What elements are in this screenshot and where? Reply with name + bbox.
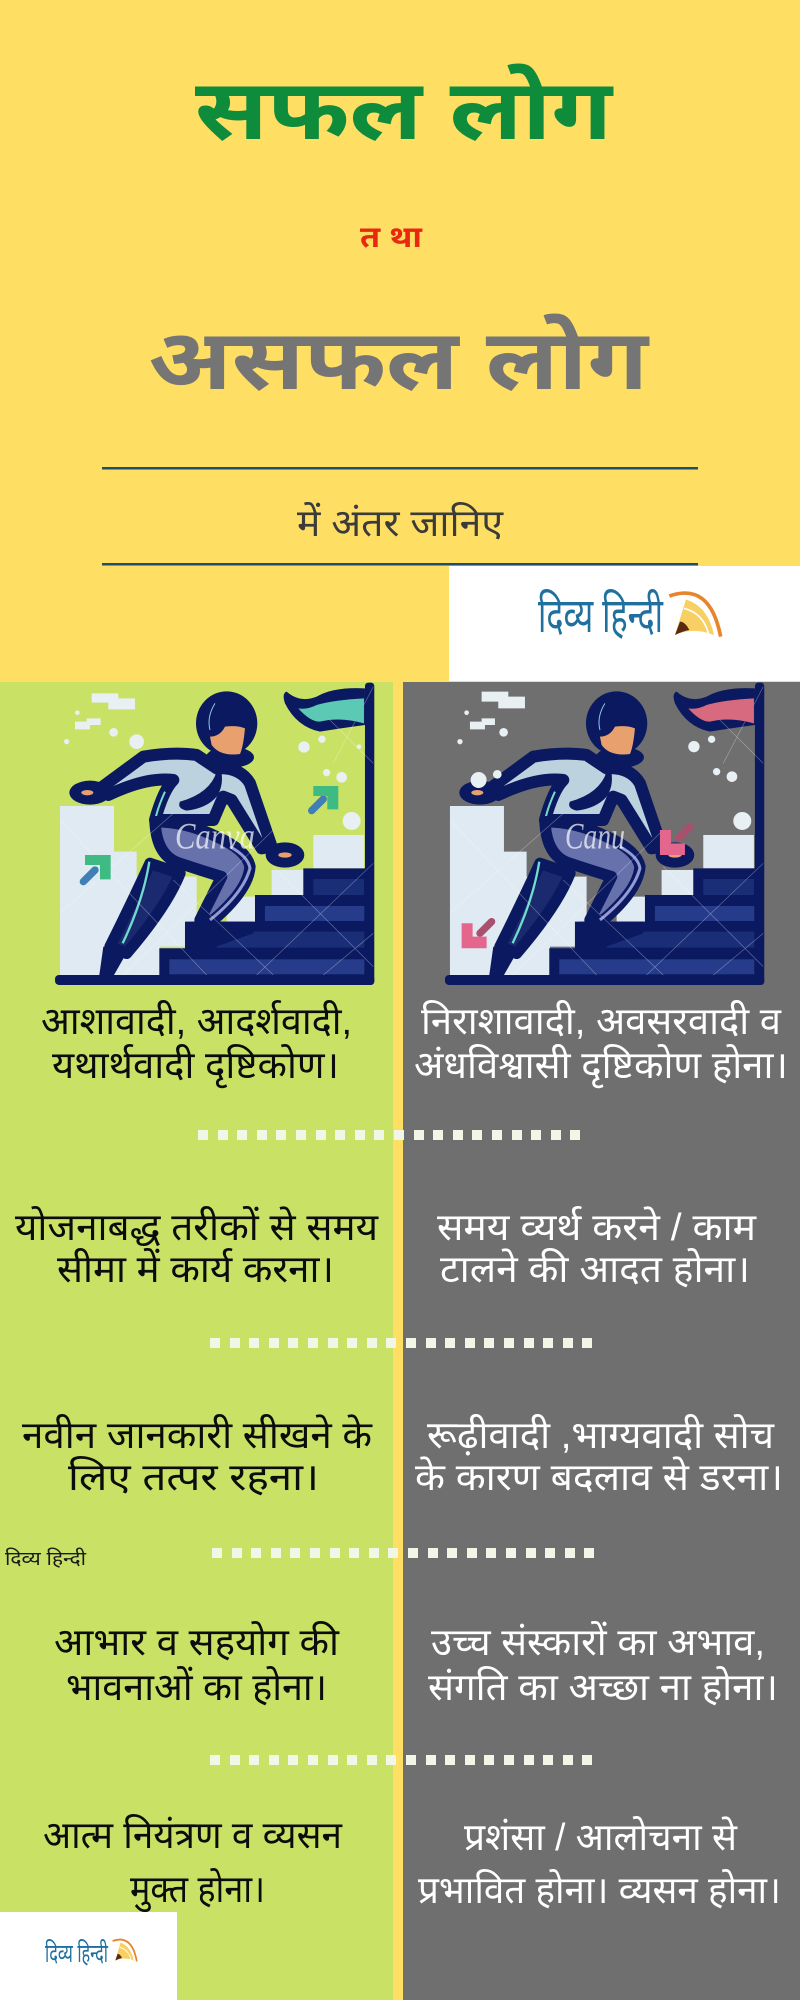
logo card: top right	[449, 566, 800, 681]
text: row 1 left: आशावादी, आदर्शवादी,	[41, 999, 352, 1043]
logo card: bottom left	[0, 1912, 177, 2000]
illustration: person climbing stairs upward	[55, 683, 374, 985]
text: row 5 right: प्रभावित होना। व्यसन होना।	[418, 1868, 781, 1912]
icon: up arrows	[83, 786, 338, 882]
text: row 2 right: समय व्यर्थ करने / काम	[437, 1205, 757, 1249]
title: unsuccessful people: असफल लोग	[148, 313, 651, 407]
text: row 3 left: लिए तत्पर रहना।	[68, 1455, 319, 1499]
text: row 1 left: यथार्थवादी दृष्टिकोण।	[52, 1043, 339, 1089]
watermark text: दिव्य हिन्दी	[5, 1548, 87, 1570]
flag: pink	[688, 698, 754, 723]
panel: successful people column	[0, 682, 393, 2000]
text: row 2 left: योजनाबद्ध तरीकों से समय	[15, 1205, 379, 1249]
watermark: Canva: Canva	[175, 815, 255, 856]
icon: down arrows	[462, 827, 690, 948]
text: row 4 right	[428, 1620, 778, 1709]
divider: row 3	[212, 1548, 594, 1558]
text: row 5 left: मुक्त होना।	[130, 1867, 265, 1912]
text: row 2 left	[15, 1205, 379, 1291]
text: row 1 right: निराशावादी, अवसरवादी व	[421, 999, 782, 1043]
divider: row 4	[210, 1755, 592, 1765]
text: row 2 right: टालने की आदत होना।	[440, 1247, 750, 1291]
text: row 3 right: रूढ़ीवादी ,भाग्यवादी सोच	[427, 1413, 775, 1457]
logo card: top right: दिव्य हिन्दी	[538, 589, 664, 643]
text: row 4 right: उच्च संस्कारों का अभाव,	[431, 1620, 765, 1664]
text: row 5 right: प्रशंसा / आलोचना से	[464, 1815, 738, 1859]
divider: row 2	[210, 1338, 592, 1348]
text: row 5 left	[43, 1813, 343, 1912]
illustration: person climbing stairs downward	[445, 683, 764, 985]
text: row 1 right	[414, 999, 788, 1089]
flag: teal	[298, 698, 364, 723]
text: row 4 left: आभार व सहयोग की	[54, 1620, 340, 1664]
text: row 5 left: आत्म नियंत्रण व व्यसन	[43, 1813, 343, 1857]
rule below subtitle	[102, 563, 698, 566]
text: row 2 right	[437, 1205, 757, 1291]
text: row 1 left	[41, 999, 352, 1089]
text: row 3 left	[22, 1413, 373, 1499]
text: row 1 right: अंधविश्वासी दृष्टिकोण होना।	[414, 1043, 788, 1089]
text: row 5 right	[418, 1815, 781, 1912]
watermark: Canva clipped: Canu	[565, 815, 625, 856]
text: row 3 right	[415, 1413, 783, 1499]
subtitle: में अंतर जानिए	[297, 501, 504, 545]
divider: row 1	[198, 1130, 580, 1140]
decorative clouds and bubbles	[64, 693, 361, 830]
logo card: bottom left: दिव्य हिन्दी	[45, 1938, 109, 1968]
text: row 2 left: सीमा में कार्य करना।	[57, 1247, 334, 1291]
text: row 3 left: नवीन जानकारी सीखने के	[22, 1413, 373, 1457]
decorative clouds and bubbles	[457, 692, 751, 830]
rule above subtitle	[102, 467, 698, 470]
connector word: त था	[360, 221, 423, 254]
text: row 4 left: भावनाओं का होना।	[66, 1665, 327, 1709]
title: successful people: सफल लोग	[195, 63, 615, 157]
text: row 3 right: के कारण बदलाव से डरना।	[415, 1455, 783, 1499]
text: row 4 right: संगति का अच्छा ना होना।	[428, 1665, 778, 1709]
panel: unsuccessful people column	[403, 682, 800, 2000]
text: row 4 left	[54, 1620, 340, 1709]
